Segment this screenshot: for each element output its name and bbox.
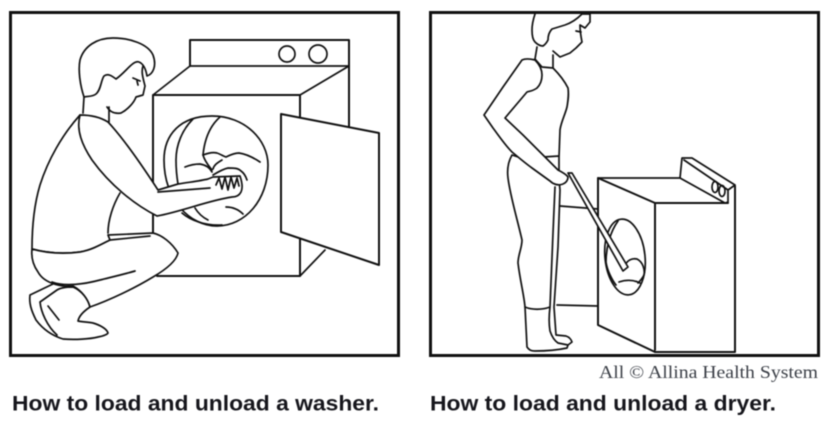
caption: washer: How to load and unload a washer. [12,392,379,416]
clothes dryer [598,158,735,352]
washer drum with laundry [164,116,268,226]
arm [484,59,568,185]
legs [508,155,572,351]
panel: dryer illustration [430,12,818,356]
washer door [281,114,379,265]
torso [530,59,568,170]
washing machine [153,40,379,276]
person standing [484,14,628,351]
feet [30,283,108,339]
panel: washer illustration [10,12,398,356]
background wall lines [557,206,598,306]
arms reaching into drum [79,115,242,216]
icon: washer knob left [279,46,295,62]
head [79,38,155,97]
reaching pole [568,173,628,271]
panel frame: washer [10,12,398,356]
icon: washer knob right [309,45,327,63]
panel frame: dryer [430,12,818,356]
icon: dryer knobs [712,182,725,196]
copyright credit: All © Allina Health System [599,362,818,382]
caption: dryer: How to load and unload a dryer. [430,392,776,416]
head [532,14,590,57]
torso [32,115,150,252]
person crouching [30,38,242,339]
dryer drum [601,217,649,297]
thigh and hip [32,233,178,307]
